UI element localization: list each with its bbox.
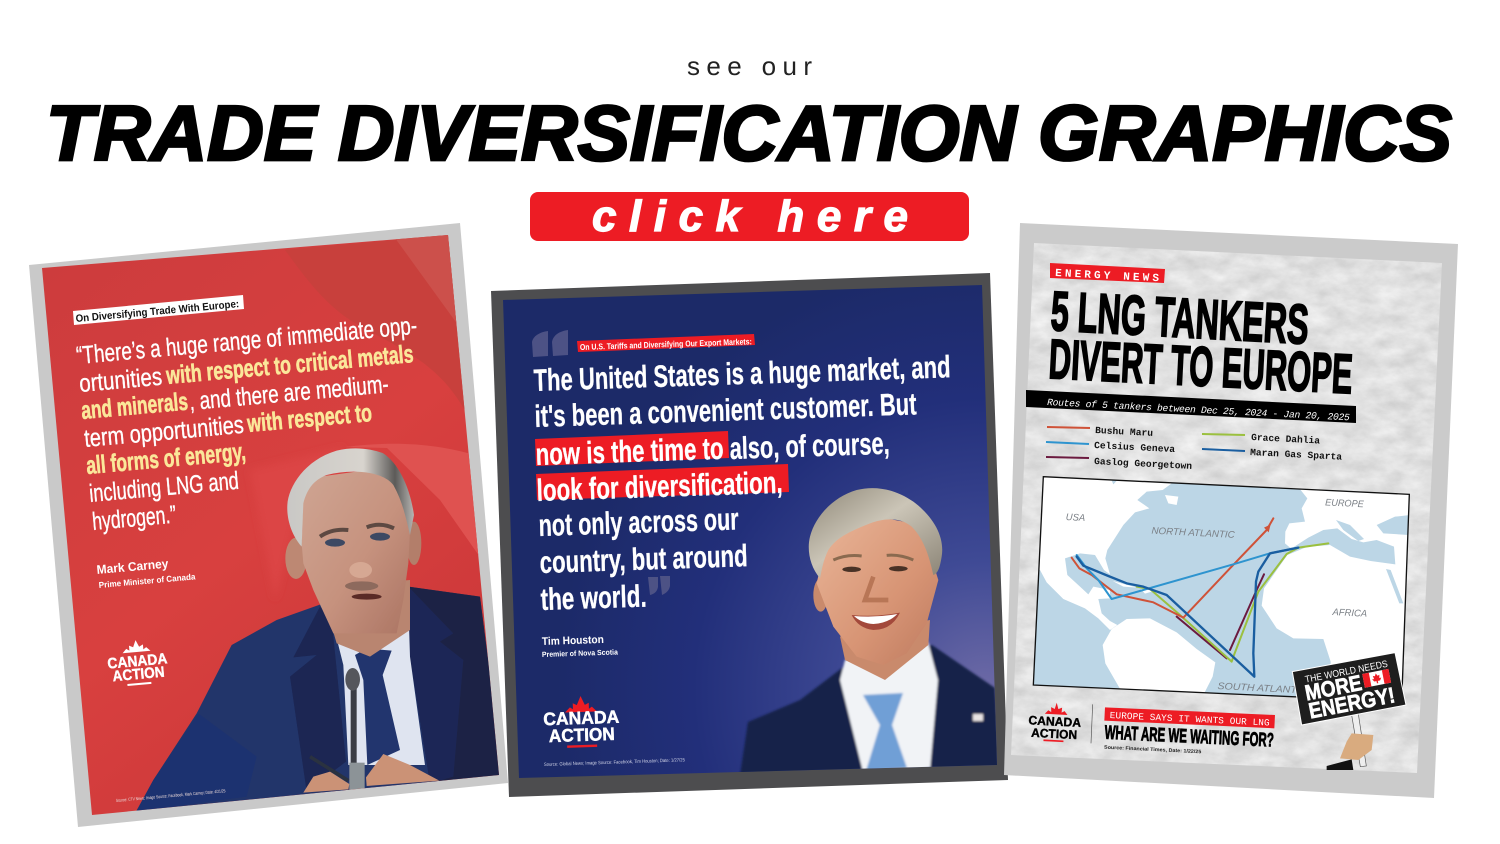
banner: Europe says: EUROPE SAYS IT WANTS OUR LNG — [1110, 710, 1270, 729]
opening quote mark — [532, 330, 568, 357]
quote text: with respect to — [245, 399, 373, 438]
left lapel — [290, 607, 346, 792]
panel: LNG tankers card — [1004, 223, 1458, 798]
ears — [285, 538, 307, 579]
card background — [503, 285, 997, 778]
legend: Gaslog Georgetown — [1094, 456, 1193, 472]
attribution: Mark Carney — [96, 557, 196, 590]
text: What are we waiting for: WHAT ARE WE WAITING FOR? — [1104, 723, 1274, 752]
main title: TRADE DIVERSIFICATION GRAPHICS — [46, 89, 1452, 177]
lapel pin — [973, 714, 983, 721]
label: On Diversifying Trade With Europe: On Diversifying Trade With Europe: — [75, 298, 240, 325]
logo: Canada Action — [1027, 701, 1082, 743]
tie — [863, 693, 907, 771]
logo: Canada Action red and white: ACTION — [548, 724, 615, 746]
highlight bars — [535, 431, 789, 500]
sign: The world needs more energy — [1292, 653, 1406, 770]
quote text: ortunities — [78, 363, 163, 398]
quote text: the world. — [540, 579, 647, 617]
quote text: it's been a convenient customer. But — [534, 386, 917, 434]
water: Adriatic — [1336, 520, 1364, 541]
quote text — [533, 349, 951, 617]
concrete background — [1011, 243, 1442, 773]
logo: Canada Action red and white — [543, 695, 620, 749]
head — [285, 448, 421, 657]
water — [1033, 477, 1409, 702]
map labels: NORTH ATLANTIC — [1151, 526, 1236, 541]
quote text: now is the time to — [535, 431, 724, 472]
mic — [351, 687, 357, 767]
hair — [809, 488, 942, 578]
map labels: USA — [1066, 512, 1085, 524]
quote text: including LNG and — [88, 467, 240, 508]
pen — [310, 757, 348, 781]
quote text — [75, 312, 418, 536]
eyes — [325, 539, 345, 547]
suit — [740, 645, 1000, 775]
quote text: and minerals — [80, 388, 189, 425]
logo: Canada Action: CANADA — [1028, 713, 1081, 730]
head — [809, 488, 942, 680]
quote text: “There’s a huge range of immediate opp- — [75, 312, 418, 370]
land: South America — [1103, 618, 1215, 695]
card frame — [1004, 223, 1458, 798]
face — [302, 468, 410, 633]
hair — [287, 448, 414, 547]
footer: logo and call to action — [1027, 701, 1275, 755]
nose — [349, 562, 372, 578]
nose shadow — [865, 577, 888, 600]
closing quote mark — [648, 576, 670, 595]
headline: 5 LNG TANKERS — [1049, 279, 1310, 356]
land: Newfoundland — [1165, 495, 1178, 505]
brows — [320, 525, 394, 537]
map labels — [1066, 497, 1367, 697]
sign handle — [1352, 714, 1366, 767]
legend: Celsius Geneva — [1094, 440, 1176, 455]
sign text — [1303, 659, 1397, 724]
ear — [813, 578, 828, 612]
card frame — [29, 223, 508, 827]
quote text: all forms of energy, — [85, 438, 247, 480]
neck — [840, 620, 930, 680]
small heading: see our: see our — [687, 51, 815, 81]
source note: Source: CTV News; Image Source: Facebook, Mark Carney; Date: 4/21/25 — [116, 788, 226, 803]
hands — [303, 772, 349, 793]
land: Europe and Africa — [1262, 485, 1417, 708]
quote text: country, but around — [539, 538, 748, 580]
hand — [1340, 733, 1373, 760]
water: Mediterranean — [1291, 528, 1395, 564]
shirt — [840, 642, 938, 772]
water: Red Sea — [1386, 569, 1403, 603]
panel: Mark Carney quote card — [29, 223, 508, 827]
icon: Canadian flag — [1362, 669, 1391, 688]
sign board — [1292, 653, 1406, 725]
photo: Tim Houston — [740, 488, 1000, 775]
attribution: Mark Carney: Mark Carney — [96, 557, 169, 577]
mouth — [352, 594, 382, 600]
map: tanker routes — [1033, 473, 1417, 708]
sign text: ENERGY! — [1307, 682, 1397, 724]
quote text: hydrogen.” — [91, 501, 177, 536]
tag: Energy News: ENERGY NEWS — [1055, 268, 1160, 285]
land: North America — [1035, 473, 1172, 630]
map labels: AFRICA — [1331, 607, 1367, 620]
eyes — [842, 567, 861, 572]
legend: Bushu Maru — [1095, 425, 1154, 439]
water: Black Sea — [1377, 515, 1410, 535]
card background — [42, 234, 499, 815]
smile — [852, 613, 900, 630]
source note: Source: Global News; Image Source: Facebook, Tim Houston; Date: 1/27/25 — [544, 757, 685, 768]
photo: Mark Carney — [135, 448, 503, 813]
attribution: Tim Houston: Premier of Nova Scotia — [542, 647, 619, 659]
logo: Canada Action white — [106, 637, 170, 688]
sleeve shading — [146, 768, 162, 794]
logo: Canada Action: ACTION — [1031, 726, 1078, 742]
card frame — [491, 273, 1008, 797]
legend: Maran Gas Sparta — [1250, 447, 1343, 463]
right jacket — [408, 587, 503, 783]
right lapel — [408, 587, 463, 783]
route lines — [1072, 518, 1328, 677]
brows — [833, 555, 913, 560]
quote text: , and there are medium- — [188, 370, 390, 416]
label: On U.S. Tariffs: On U.S. Tariffs and Diversifying Our Export Markets: — [580, 336, 752, 352]
logo: Canada Action red and white: CANADA — [543, 707, 620, 729]
tie — [355, 648, 400, 765]
sign text: MORE — [1303, 670, 1364, 706]
face — [817, 517, 938, 665]
attribution: Tim Houston — [542, 634, 619, 659]
cuff — [1327, 759, 1353, 770]
quote text: also, of course, — [729, 426, 890, 466]
shirt — [338, 630, 425, 765]
headline — [1047, 279, 1354, 405]
sign text: THE WORLD NEEDS — [1304, 659, 1389, 686]
suit — [135, 587, 503, 813]
map labels: SOUTH ATLANTIC — [1217, 681, 1309, 697]
quote text: with respect to critical metals — [164, 340, 415, 390]
panel: Tim Houston quote card — [491, 273, 1008, 797]
subtitle bar: Routes of 5 tankers between Dec 25, 2024 - Jan 20, 2025 — [1047, 397, 1350, 423]
quote text: not only across our — [538, 501, 739, 543]
legend — [1046, 425, 1343, 472]
map labels: EUROPE — [1325, 497, 1365, 510]
neck — [334, 580, 410, 657]
quote text: term opportunities — [83, 411, 245, 453]
arrow head — [1264, 524, 1271, 532]
land: Caribbean islands — [1113, 581, 1156, 594]
moustache shadow — [345, 581, 378, 591]
quote text: look for diversification, — [536, 465, 783, 508]
quote text: The United States is a huge market, and — [533, 349, 951, 398]
attribution: Mark Carney: Prime Minister of Canada — [98, 571, 196, 590]
legend: Grace Dahlia — [1251, 432, 1321, 446]
source note: Source: Financial Times, Date: 1/22/25 — [1104, 745, 1202, 755]
logo: Canada Action white: ACTION — [112, 664, 165, 685]
logo: Canada Action white: CANADA — [107, 650, 168, 673]
button: click here: click here — [592, 192, 908, 241]
attribution: Tim Houston: Tim Houston — [542, 634, 604, 648]
